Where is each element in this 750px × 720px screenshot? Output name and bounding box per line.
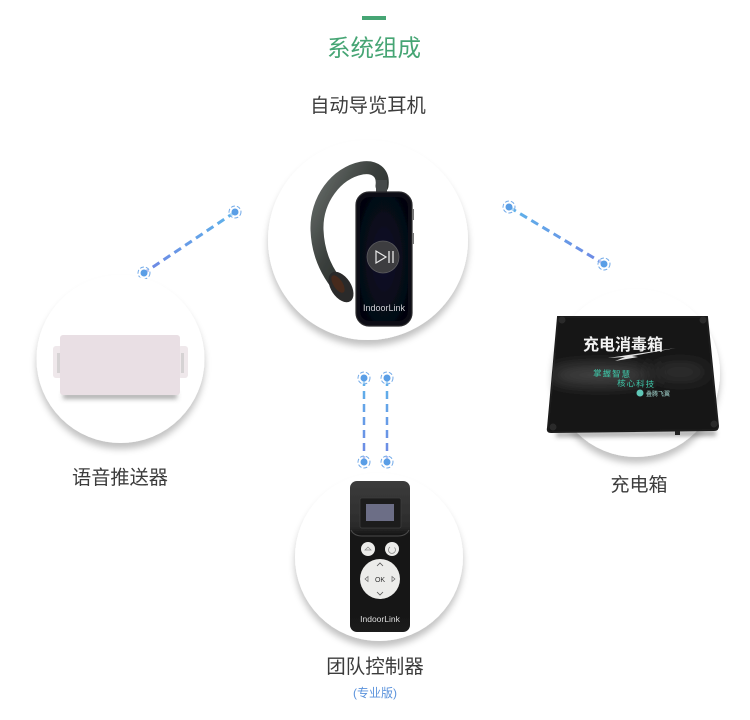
title accent bar: [362, 16, 386, 20]
circle: pusher backdrop: [36, 275, 204, 443]
icon: earphone: IndoorLink: [363, 303, 406, 313]
icon: charging box device: 掌握智慧: [593, 368, 631, 379]
panel: charging box: [546, 316, 724, 493]
icon: charging box device: 叠腾飞翼: [646, 390, 670, 398]
circle: charging box backdrop: [552, 289, 720, 457]
panel: team controller: [295, 473, 463, 700]
icon: team controller device: IndoorLink: [360, 614, 401, 624]
title: 系统组成: [327, 35, 421, 61]
icon: earphone: [317, 168, 414, 326]
circle: earphone backdrop: [268, 140, 468, 340]
connector: earphone to controller: [358, 372, 393, 468]
label: professional edition: (专业版): [353, 685, 397, 700]
label: voice pusher: 语音推送器: [72, 467, 168, 489]
icon: team controller device: [350, 481, 410, 632]
label: auto guide earphone: 自动导览耳机: [310, 95, 426, 117]
label: charging box: 充电箱: [610, 474, 668, 496]
connector: earphone to voice pusher: [138, 206, 241, 279]
icon: voice pusher device: [53, 335, 188, 399]
icon: charging box device: 核心科技: [617, 378, 655, 389]
icon: team controller device: OK: [375, 577, 385, 584]
icon: charging box device: 充电消毒箱: [583, 335, 663, 354]
circle: controller backdrop: [295, 473, 463, 641]
connector: earphone to charging box: [503, 201, 610, 270]
label: team controller: 团队控制器: [326, 656, 424, 678]
panel: earphone: [268, 140, 468, 340]
panel: voice pusher: [36, 275, 204, 489]
icon: charging box device: [545, 316, 718, 437]
